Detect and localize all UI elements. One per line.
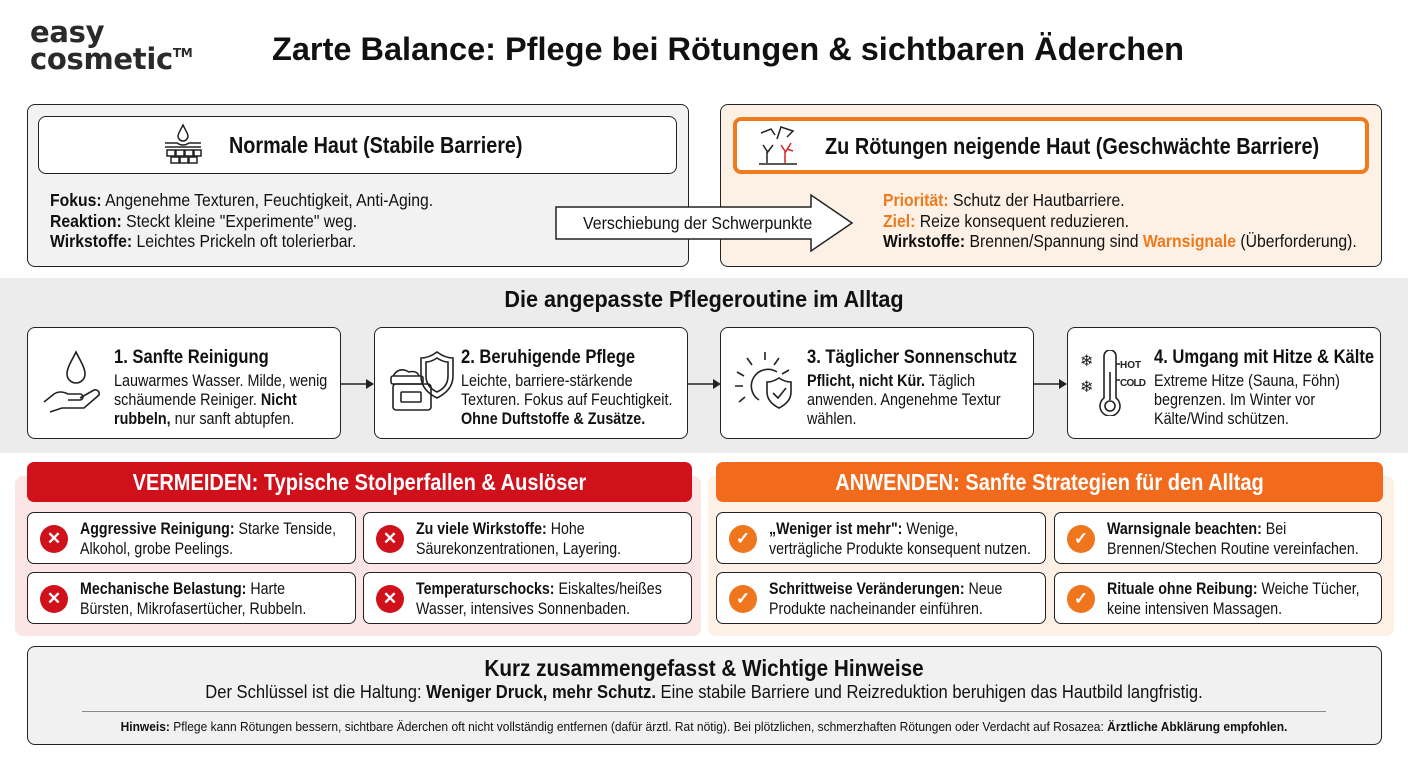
text: normal skin details <box>50 190 433 251</box>
arrow 2-3 <box>688 379 720 389</box>
text: normal skin details: Reaktion: Steckt kleine "Experimente" weg. <box>50 210 357 230</box>
arrow 1-2 <box>341 379 374 389</box>
item: temperature <box>363 572 692 624</box>
icon: sun shield <box>735 352 792 409</box>
step 1: schäumende Reiniger. Nicht <box>114 391 297 409</box>
text: normal skin details: Wirkstoffe: Leichtes Prickeln oft tolerierbar. <box>50 231 356 251</box>
header: apply <box>716 462 1383 502</box>
step 3: 3. Täglicher Sonnenschutz <box>807 346 1017 368</box>
icon: irritated skin <box>759 126 797 165</box>
icon: water hand <box>44 350 100 413</box>
item: temperature: Temperaturschocks: Eiskaltes/heißes <box>416 580 662 598</box>
text: key message: Der Schlüssel ist die Haltung: Weniger Druck, mehr Schutz. Eine stabile Barriere und Reizreduktion beruhigen das Hautbild langfristig. <box>205 682 1203 702</box>
band: routine <box>0 278 1408 453</box>
heading: routine: Die angepasste Pflegeroutine im Alltag <box>504 286 904 312</box>
step 4: Extreme Hitze (Sauna, Föhn) <box>1154 372 1340 390</box>
logo: cosmeticTM <box>30 42 192 76</box>
panel: avoid <box>15 476 701 636</box>
step 1: rubbeln, nur sanft abtupfen. <box>114 410 294 428</box>
item: gradual: Schrittweise Veränderungen: Neue <box>769 580 1002 598</box>
step 4: 4. Umgang mit Hitze & Kälte <box>1154 346 1374 368</box>
item: warning signals: ✓ <box>1074 529 1088 548</box>
text: sensitive skin details: Wirkstoffe: Brennen/Spannung sind Warnsignale (Überforderung). <box>883 231 1357 251</box>
text: sensitive skin details: Priorität: Schutz der Hautbarriere. <box>883 190 1125 210</box>
step 2: Ohne Duftstoffe & Zusätze. <box>461 410 645 428</box>
icon: thermometer: ❄ <box>1080 379 1093 396</box>
step 2: Texturen. Fokus auf Feuchtigkeit. <box>461 391 672 409</box>
step 2 <box>374 327 688 439</box>
item: warning signals <box>1054 512 1382 564</box>
arrow 3-4 <box>1034 379 1067 389</box>
icon: thermometer: HOT <box>1120 360 1141 371</box>
item: gradual: Produkte nacheinander einführen. <box>769 600 983 618</box>
item: less is more: „Weniger ist mehr": Wenige, <box>769 520 958 538</box>
item: less is more: ✓ <box>736 529 750 548</box>
header: avoid: VERMEIDEN: Typische Stolperfallen & Auslöser <box>133 469 586 495</box>
item: gradual <box>716 572 1046 624</box>
item: gradual: ✓ <box>736 589 750 608</box>
item: too many actives: Säurekonzentrationen, Layering. <box>416 540 621 558</box>
item: aggressive cleansing: ✕ <box>47 529 61 548</box>
item: rituals <box>1054 572 1382 624</box>
text: sensitive skin details: Ziel: Reize konsequent reduzieren. <box>883 210 1129 230</box>
icon: thermometer <box>1080 350 1146 416</box>
step 3: wählen. <box>807 410 856 428</box>
header: sensitive skin <box>733 117 1369 174</box>
step 4 <box>1067 327 1381 439</box>
item: rituals: Rituale ohne Reibung: Weiche Tücher, <box>1107 580 1360 598</box>
item: temperature: Wasser, intensives Sonnenbaden. <box>416 600 630 618</box>
header: normal skin <box>38 116 677 174</box>
header: normal skin: Normale Haut (Stabile Barriere) <box>229 132 523 158</box>
step 1: Lauwarmes Wasser. Milde, wenig <box>114 372 327 390</box>
logo: easy <box>30 15 104 49</box>
step 1: 1. Sanfte Reinigung <box>114 346 269 368</box>
text: sensitive skin details <box>883 190 1357 251</box>
arrow: shift of focus: Verschiebung der Schwerpunkte <box>583 213 812 233</box>
arrow: shift of focus <box>555 194 854 252</box>
item: warning signals: Brennen/Stechen Routine vereinfachen. <box>1107 540 1359 558</box>
step 3: Pflicht, nicht Kür. Täglich <box>807 372 975 390</box>
panel: apply <box>708 476 1394 636</box>
item: warning signals: Warnsignale beachten: Bei <box>1107 520 1286 538</box>
title: Zarte Balance: Pflege bei Rötungen & sichtbaren Äderchen <box>272 31 1184 67</box>
item: mechanical: Mechanische Belastung: Harte <box>80 580 285 598</box>
logo <box>30 15 192 76</box>
item: too many actives: ✕ <box>383 529 397 548</box>
panel: normal skin <box>27 104 689 267</box>
item: mechanical <box>27 572 356 624</box>
item: mechanical: Bürsten, Mikrofasertücher, Rubbeln. <box>80 600 306 618</box>
icon: thermometer: ❄ <box>1080 353 1093 370</box>
text: normal skin details: Fokus: Angenehme Texturen, Feuchtigkeit, Anti-Aging. <box>50 190 433 210</box>
text: note: Hinweis: Pflege kann Rötungen bessern, sichtbare Äderchen oft nicht vollständig entfernen (dafür ärztl. Rat nötig). Bei plötzlichen, schmerzhaften Rötungen oder Verdacht auf Rosazea: Ärztliche Abklärung empfohlen. <box>121 720 1287 734</box>
icon: thermometer: COLD <box>1120 378 1146 389</box>
item: mechanical: ✕ <box>47 589 61 608</box>
item: less is more <box>716 512 1046 564</box>
item: less is more: verträgliche Produkte konsequent nutzen. <box>769 540 1031 558</box>
panel: sensitive skin <box>720 104 1382 267</box>
step 4: Kälte/Wind schützen. <box>1154 410 1289 428</box>
step 4: begrenzen. Im Winter vor <box>1154 391 1315 409</box>
item: rituals: keine intensiven Massagen. <box>1107 600 1282 618</box>
step 3: anwenden. Angenehme Textur <box>807 391 1001 409</box>
icon: cream shield <box>390 351 454 411</box>
item: temperature: ✕ <box>383 589 397 608</box>
step 2: Leichte, barriere-stärkende <box>461 372 633 390</box>
item: too many actives: Zu viele Wirkstoffe: Hohe <box>416 520 585 538</box>
panel: summary <box>27 646 1382 745</box>
icon: skin barrier <box>165 124 202 164</box>
header: sensitive skin: Zu Rötungen neigende Haut (Geschwächte Barriere) <box>825 133 1319 159</box>
step 3 <box>720 327 1034 439</box>
item: aggressive cleansing <box>27 512 356 564</box>
item: aggressive cleansing: Aggressive Reinigung: Starke Tenside, <box>80 520 336 538</box>
header: avoid <box>27 462 692 502</box>
heading: summary: Kurz zusammengefasst & Wichtige Hinweise <box>484 655 924 681</box>
step 1 <box>27 327 341 439</box>
header: apply: ANWENDEN: Sanfte Strategien für den Alltag <box>835 469 1264 495</box>
item: rituals: ✓ <box>1074 589 1088 608</box>
item: aggressive cleansing: Alkohol, grobe Peelings. <box>80 540 233 558</box>
item: too many actives <box>363 512 692 564</box>
step 2: 2. Beruhigende Pflege <box>461 346 635 368</box>
